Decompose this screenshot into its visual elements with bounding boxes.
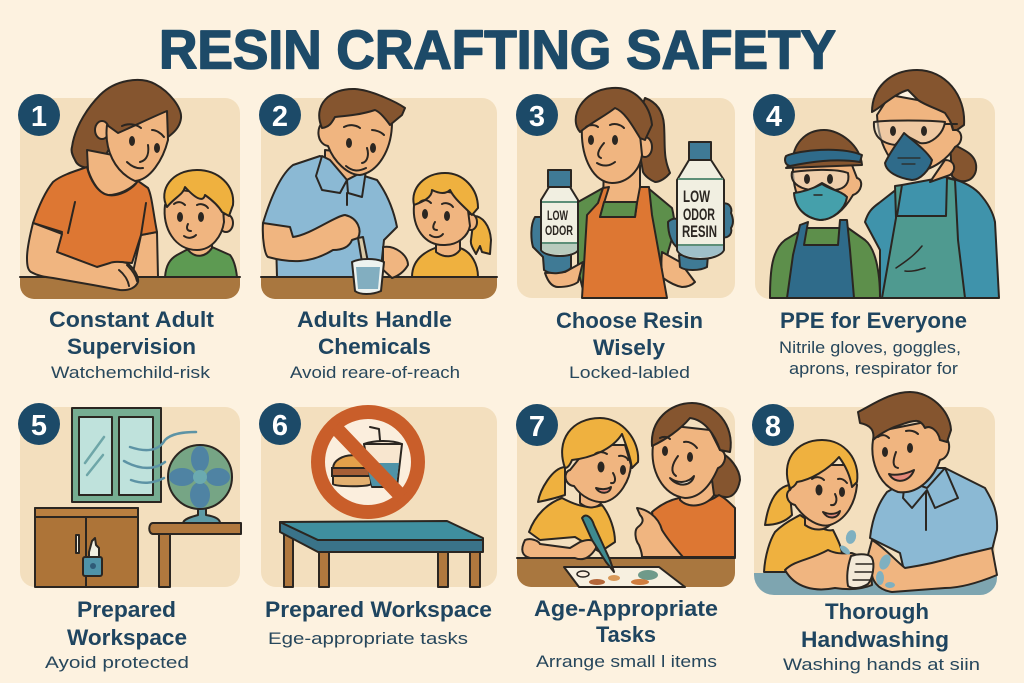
illustration: locked cabinet <box>35 508 138 587</box>
illustration: woman gesturing <box>635 403 740 557</box>
panel 2: adults handle chemicals <box>259 89 497 382</box>
number badge 6 <box>259 403 301 445</box>
caption 4: aprons, respirator for <box>789 359 958 378</box>
number badge 2 <box>259 94 301 136</box>
number badge 5: 5 <box>31 410 47 442</box>
illustration: gloves <box>531 203 733 273</box>
heading 8: Thorough <box>825 599 929 624</box>
heading 4: PPE for Everyone <box>780 308 967 333</box>
panel 3: choose resin wisely <box>516 88 735 382</box>
icon: burger <box>332 455 372 486</box>
illustration: counter <box>754 573 997 595</box>
caption 8: Washing hands at siin <box>783 655 980 674</box>
illustration: girl <box>412 173 491 277</box>
number badge 8: 8 <box>765 411 781 443</box>
illustration: small bottle: LOW <box>547 207 569 223</box>
illustration: fan <box>168 445 232 523</box>
heading 7 <box>534 596 718 647</box>
heading 1 <box>49 307 215 359</box>
caption 2: Avoid reare-of-reach <box>290 363 460 382</box>
illustration: workbench <box>280 521 483 587</box>
number badge 7 <box>516 404 558 446</box>
heading 2: Chemicals <box>318 334 431 359</box>
caption 6: Ege-appropriate tasks <box>268 629 468 648</box>
panel 7: age-appropriate tasks <box>516 403 740 671</box>
caption 4 <box>779 338 961 378</box>
illustration: small bottle: ODOR <box>545 222 573 238</box>
heading 2: Adults Handle <box>297 307 452 332</box>
illustration: table and paper <box>517 558 735 587</box>
illustration: father <box>858 392 997 592</box>
panel 1: constant adult supervision <box>18 80 240 382</box>
heading 3 <box>556 308 703 360</box>
illustration: father stirring <box>263 89 408 278</box>
illustration: stir stick and glass <box>352 237 384 294</box>
caption 5: Ayoid protected <box>45 653 189 672</box>
number badge 5 <box>18 403 60 445</box>
panel 5: prepared workspace, ventilation <box>18 403 241 672</box>
illustration: small bottle <box>541 170 578 256</box>
panel 6: no food sign <box>259 403 497 648</box>
illustration: woman with apron <box>545 88 695 298</box>
number badge 4 <box>753 94 795 136</box>
number badge 2: 2 <box>272 101 288 133</box>
illustration: child <box>164 170 237 277</box>
table <box>20 277 240 299</box>
illustration: side table <box>149 523 241 587</box>
illustration: window <box>72 408 161 502</box>
illustration: girl <box>764 440 872 589</box>
heading 3: Choose Resin <box>556 308 703 333</box>
illustration: hands and water <box>838 529 895 588</box>
illustration: child in PPE <box>770 130 880 298</box>
panel 4: PPE for everyone <box>753 70 999 378</box>
heading 8: Handwashing <box>801 627 949 652</box>
number badge 1 <box>18 94 60 136</box>
illustration: large bottle <box>677 142 724 259</box>
caption 3: Locked-labled <box>569 363 690 382</box>
number badge 4: 4 <box>766 101 782 133</box>
illustration: large bottle: ODOR <box>683 205 715 224</box>
heading 7: Tasks <box>596 622 656 647</box>
illustration: mother <box>27 80 181 290</box>
number badge 8 <box>752 404 794 446</box>
number badge 1: 1 <box>31 101 47 133</box>
caption 4: Nitrile gloves, goggles, <box>779 338 961 357</box>
illustration: large bottle: LOW <box>683 187 711 206</box>
heading 7: Age-Appropriate <box>534 596 718 621</box>
caption 7: Arrange small l items <box>536 652 717 671</box>
icon: cup with straw <box>364 427 402 487</box>
heading 1: Constant Adult <box>49 307 215 332</box>
title: RESIN CRAFTING SAFETY <box>159 18 836 80</box>
heading 5 <box>67 597 187 650</box>
heading 2 <box>297 307 452 359</box>
panel 8: thorough handwashing <box>752 392 997 674</box>
number badge 7: 7 <box>529 411 545 443</box>
heading 1: Supervision <box>67 334 196 359</box>
table <box>261 277 497 299</box>
number badge 3: 3 <box>529 101 545 133</box>
illustration: no food or drink sign <box>318 412 418 512</box>
illustration: adult in PPE <box>865 70 999 298</box>
heading 3: Wisely <box>593 335 666 360</box>
heading 5: Workspace <box>67 625 187 650</box>
illustration: air flow lines <box>124 432 196 483</box>
number badge 3 <box>516 94 558 136</box>
heading 6: Prepared Workspace <box>265 597 492 622</box>
number badge 6: 6 <box>272 410 288 442</box>
heading 5: Prepared <box>77 597 176 622</box>
illustration: large bottle: RESIN <box>682 222 717 241</box>
illustration: girl painting <box>522 418 638 572</box>
heading 8 <box>801 599 949 652</box>
caption 1: Watchemchild-risk <box>51 363 211 382</box>
